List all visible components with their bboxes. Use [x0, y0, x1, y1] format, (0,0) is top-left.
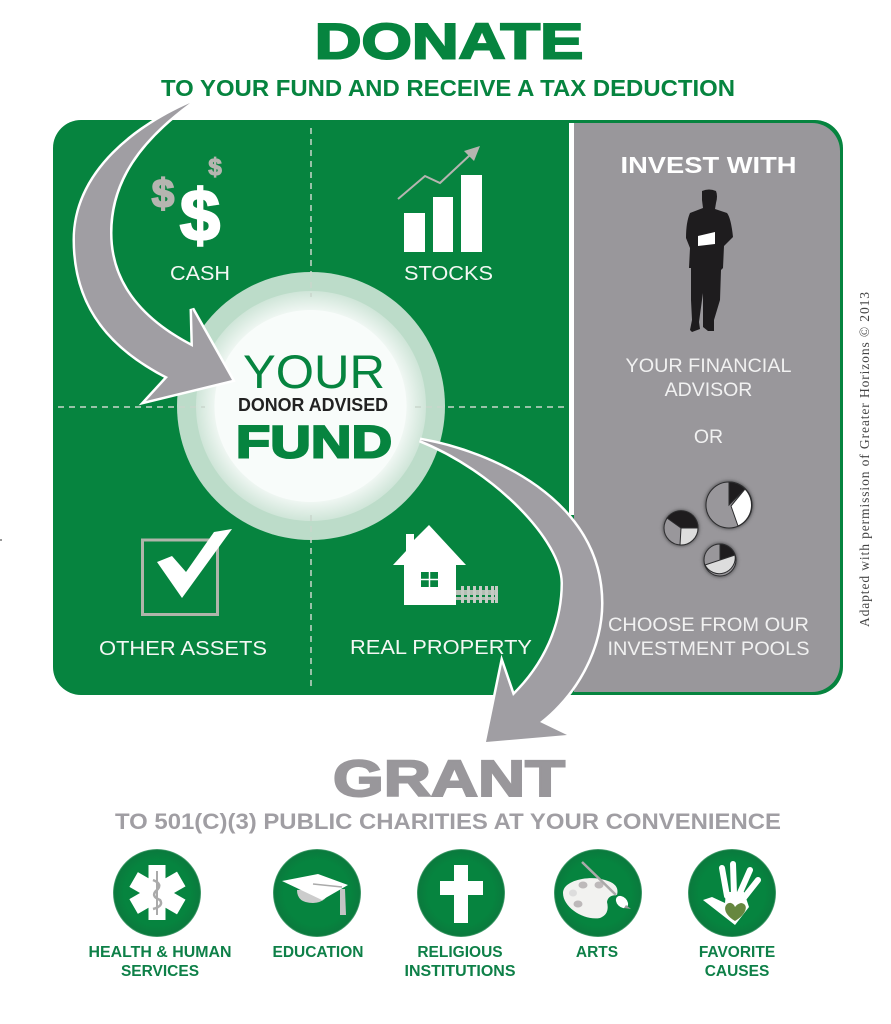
panel: invest with: INVESTMENT POOLS	[608, 638, 810, 660]
chart: large investment pool pie	[706, 482, 752, 528]
icon: other assets checkbox	[142, 529, 232, 614]
text: your financial advisor: YOUR FINANCIAL	[626, 355, 792, 377]
icon: religious institutions	[417, 849, 505, 937]
icon: health and human services	[113, 849, 201, 937]
text: fund: FUND	[236, 417, 392, 467]
chart: left investment pool pie	[664, 511, 698, 545]
icon: real property house	[393, 525, 498, 605]
labels: charity categories: HEALTH & HUMAN	[88, 944, 232, 961]
arrow: fund to grant	[420, 440, 601, 742]
label: stocks: STOCKS	[404, 263, 493, 285]
heading: grant: GRANT	[333, 751, 565, 807]
icon: arts	[554, 849, 642, 937]
credit: vertical attribution: Adapted with permission of Greater Horizons © 2013	[857, 292, 872, 627]
labels: charity categories: CAUSES	[705, 963, 769, 980]
labels: charity categories: SERVICES	[121, 963, 199, 980]
title: donate: DONATE	[315, 14, 583, 70]
arrow: donate into fund	[75, 103, 232, 401]
labels: charity categories: ARTS	[576, 944, 618, 961]
icon: cash: $	[208, 154, 222, 181]
label: real property: REAL PROPERTY	[350, 637, 532, 659]
labels: charity categories: RELIGIOUS	[417, 944, 503, 961]
labels: charity categories: INSTITUTIONS	[404, 963, 516, 980]
labels: charity categories: EDUCATION	[272, 944, 364, 961]
icon: financial advisor silhouette	[686, 190, 733, 332]
icon: cash: $	[152, 172, 174, 216]
icon: cash	[152, 154, 222, 256]
text: your: YOUR	[243, 345, 385, 398]
label: other assets: OTHER ASSETS	[99, 638, 267, 660]
chart: bottom investment pool pie	[704, 544, 736, 576]
labels: charity categories	[88, 944, 775, 980]
icon: cash: $	[180, 176, 220, 256]
text: or: OR	[694, 426, 723, 448]
subtitle: donate: TO YOUR FUND AND RECEIVE A TAX DEDUCTION	[161, 75, 735, 101]
text: donor advised: DONOR ADVISED	[238, 395, 388, 415]
icon: stocks	[398, 146, 482, 252]
labels: charity categories: FAVORITE	[699, 944, 775, 961]
panel: invest with	[569, 123, 840, 692]
center circle: your donor advised fund	[177, 272, 445, 540]
heading: invest with: INVEST WITH	[620, 152, 796, 178]
subtitle: grant: TO 501(C)(3) PUBLIC CHARITIES AT YOUR CONVENIENCE	[115, 809, 781, 834]
label: cash: CASH	[170, 263, 230, 285]
text: choose from our investment pools: CHOOSE FROM OUR	[608, 614, 809, 636]
icon: favorite causes	[688, 849, 776, 937]
panel: invest with: ADVISOR	[665, 379, 752, 401]
panel: green asset quadrant background	[53, 120, 843, 695]
icon: education	[273, 849, 361, 937]
